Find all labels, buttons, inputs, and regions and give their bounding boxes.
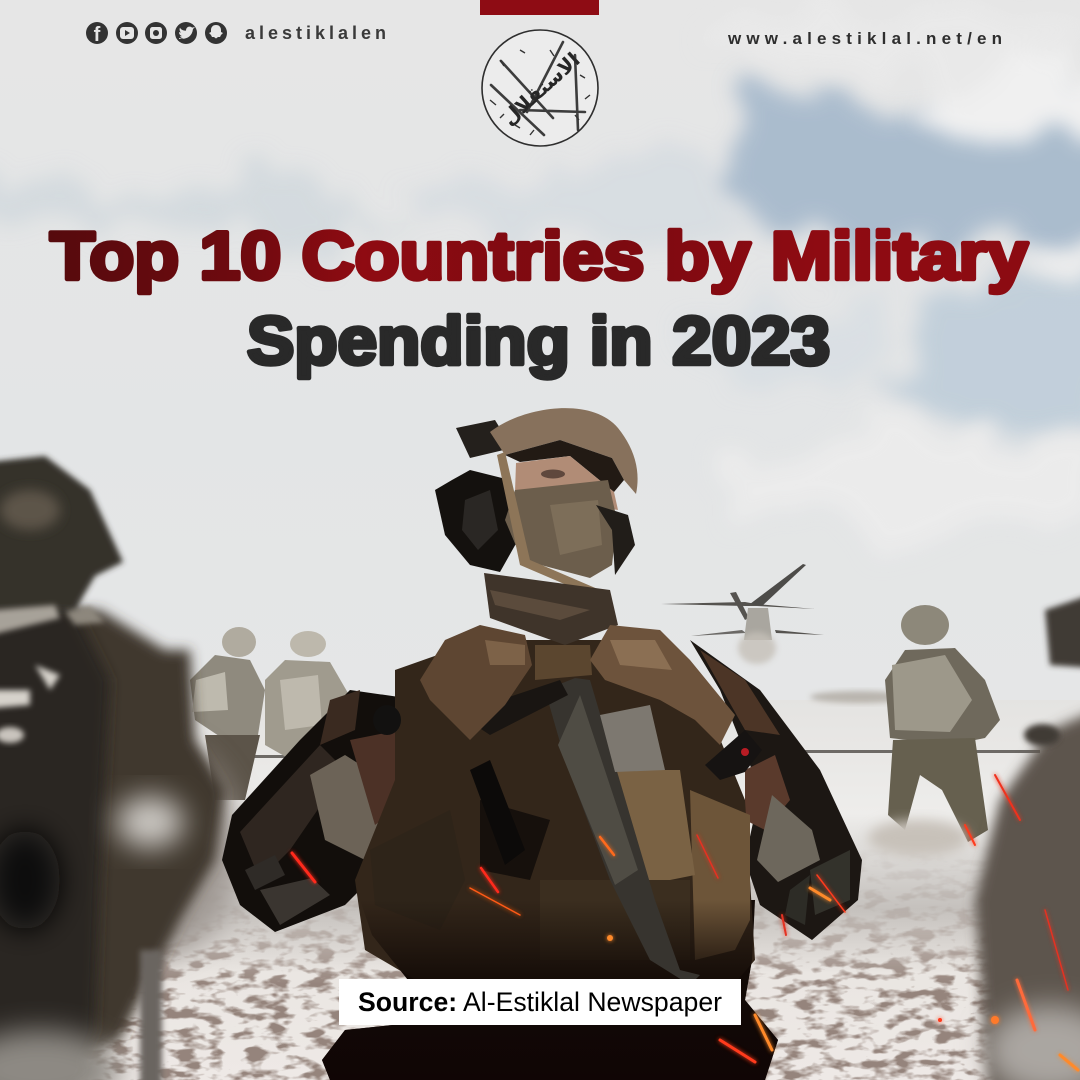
vest shadow [322,900,778,1080]
title [50,218,1028,379]
watch left [373,705,401,735]
neck wrap [484,573,618,645]
soldier lower body [322,900,778,1080]
logo: الاستقلال [497,48,585,130]
title line 1: Top 10 Countries by Military [50,218,1028,294]
logo [482,30,598,146]
helicopter [661,564,824,664]
source caption [339,979,741,1025]
social icons [86,22,227,46]
glove right [590,625,735,745]
sparks [292,775,1078,1070]
background soldiers left [190,627,352,800]
watch right [705,730,762,780]
ground [0,691,1080,1080]
icon: twitter [175,22,197,44]
main soldier [222,408,862,1080]
soldier right arm [690,640,862,940]
social handle: alestiklalen [245,23,386,43]
icon: snapchat [205,22,227,44]
icon: facebook [86,22,108,46]
title line 2: Spending in 2023 [247,303,830,379]
blurred foreground soldier left [0,456,240,1080]
glove left [420,625,532,740]
earpiece right [596,505,635,575]
soldier vest [355,640,755,1000]
background soldier right [868,605,1000,856]
helmet strap [497,452,600,598]
helmet [435,408,638,572]
eye [541,470,565,478]
website url: www.alestiklal.net/en [727,29,1002,48]
soldier left arm [222,690,425,932]
face mask [505,480,617,578]
rifle [470,678,700,985]
magazine [600,705,665,772]
top red tab [480,0,599,15]
icon: instagram [145,22,167,44]
icon: facebook: f [94,24,101,46]
face [515,456,618,510]
blurred foreground soldier right [975,585,1080,1080]
icon: youtube [116,22,138,44]
source caption: Source: Al-Estiklal Newspaper [358,987,722,1017]
